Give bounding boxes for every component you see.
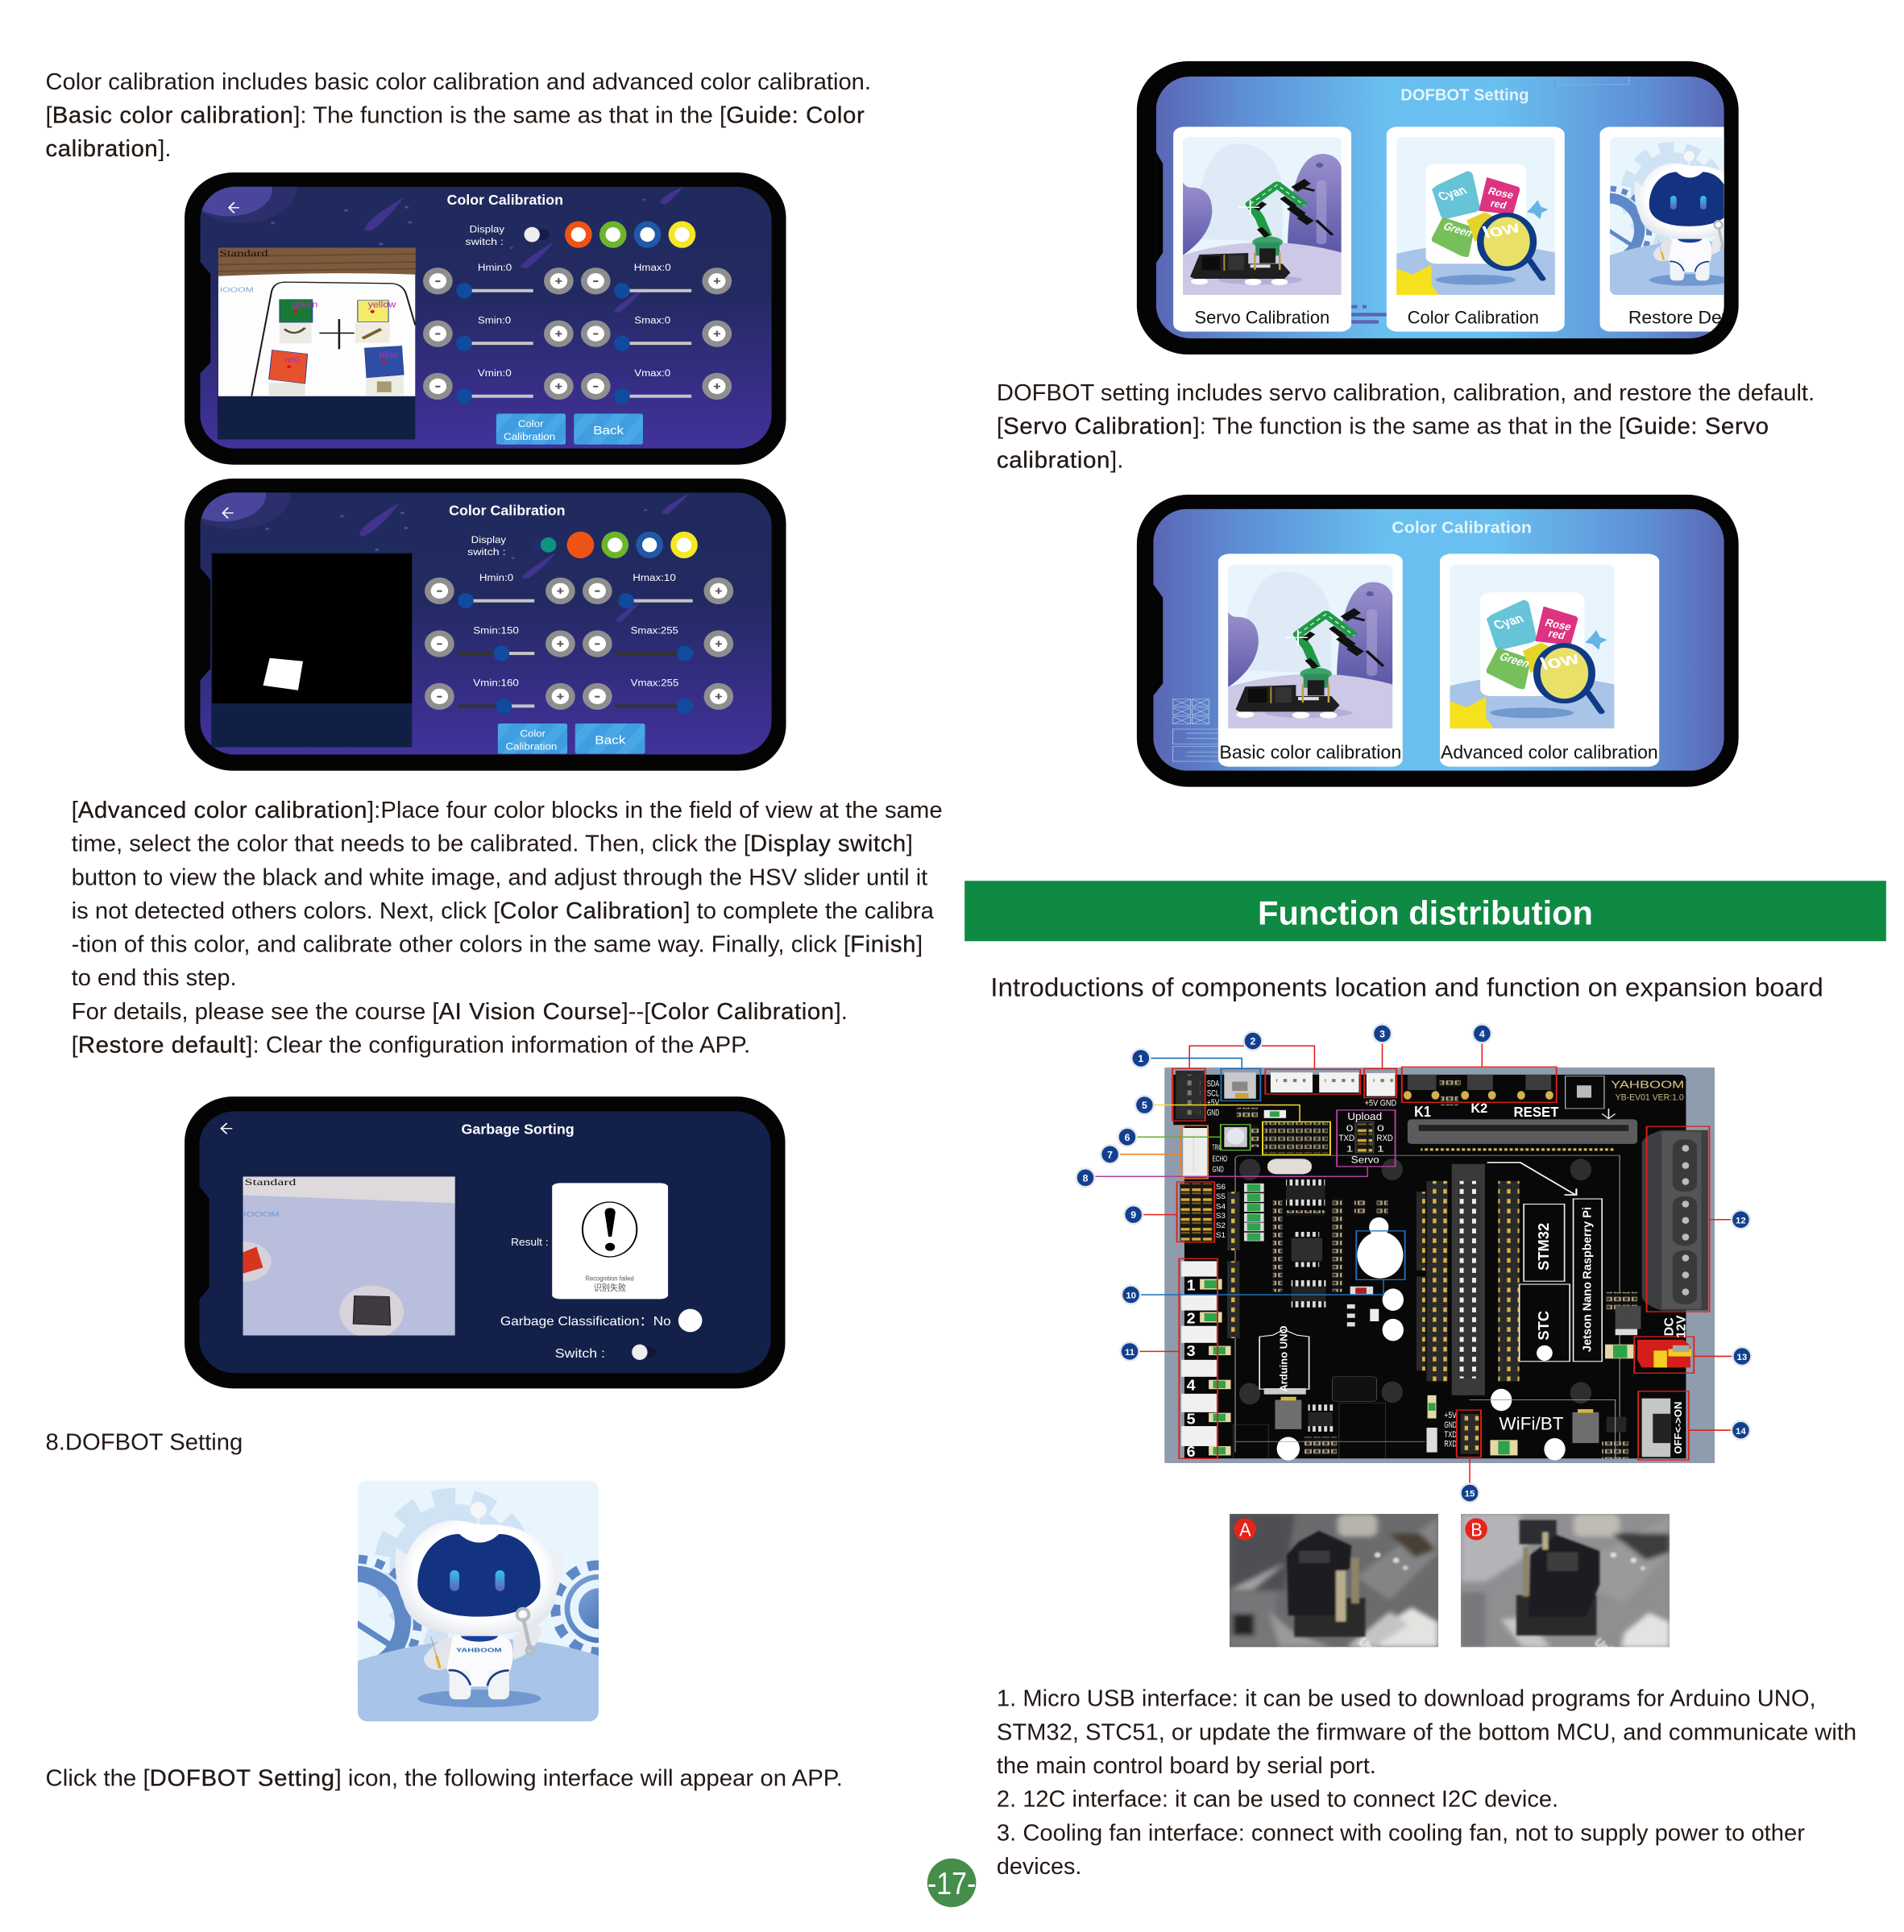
number badge 6: 6 bbox=[1125, 1132, 1130, 1143]
card: advanced color calibration: Advanced color calibration bbox=[1441, 743, 1658, 763]
component list text: 3. Cooling fan interface: connect with cooling fan, not to supply power to other bbox=[997, 1820, 1805, 1846]
expansion board diagram: TXD bbox=[1444, 1430, 1457, 1440]
DOFBOT setting description text: calibration]. bbox=[997, 447, 1123, 473]
expansion board diagram: K1 bbox=[1414, 1103, 1431, 1120]
camera image with colour cubes bbox=[218, 247, 415, 439]
result card: recognition failed: 识别失败 bbox=[594, 1283, 626, 1292]
badge B: B bbox=[1471, 1519, 1483, 1540]
back arrow bbox=[221, 1123, 232, 1134]
result card: recognition failed: Recognition failed bbox=[586, 1275, 634, 1283]
HSV sliders bbox=[425, 573, 733, 714]
HSV sliders: Vmin:0 bbox=[478, 368, 512, 379]
expansion board diagram: 1 bbox=[1377, 1144, 1384, 1155]
HSV sliders: Hmax:10 bbox=[633, 573, 676, 583]
component list text: the main control board by serial port. bbox=[997, 1753, 1376, 1779]
expansion board diagram: GND bbox=[1444, 1420, 1457, 1429]
phone: color calibration menu bbox=[1137, 495, 1739, 787]
switch toggle bbox=[555, 1345, 656, 1361]
expansion board diagram: RESET bbox=[1514, 1104, 1559, 1120]
heading: 8. DOFBOT Setting: 8.DOFBOT Setting bbox=[46, 1430, 243, 1456]
number badge 13: 13 bbox=[1737, 1353, 1747, 1362]
back arrow bbox=[223, 508, 234, 518]
badge B bbox=[1465, 1518, 1487, 1540]
card: advanced color calibration: Rose bbox=[1543, 616, 1574, 633]
HSV sliders: Smax:255 bbox=[631, 625, 678, 636]
card: advanced color calibration bbox=[1440, 553, 1659, 767]
display switch with colour selectors bbox=[466, 221, 695, 248]
intro text block: Color calibration includes basic color calibration and advanced color calibration. bbox=[46, 69, 871, 95]
intro text block: [Basic color calibration ]: The function is the same as that in the [ Guide: Color bbox=[46, 103, 865, 129]
advanced color calibration text block: For details, please see the course [ AI Vision Course]--[Color Calibration]. bbox=[72, 999, 848, 1025]
section banner: function distribution bbox=[964, 881, 1886, 941]
HSV sliders: Smin:0 bbox=[478, 315, 511, 326]
DOFBOT setting description text: DOFBOT setting includes servo calibration, calibration, and restore the default. bbox=[997, 380, 1815, 406]
card: advanced color calibration: Cyan bbox=[1491, 612, 1527, 632]
rotated board labels: Raspberry Pi bbox=[1582, 1207, 1595, 1279]
expansion board diagram: S2 bbox=[1216, 1222, 1226, 1229]
camera image with colour cubes: green bbox=[292, 300, 317, 309]
advanced color calibration text block: to end this step. bbox=[72, 965, 237, 991]
advanced color calibration text block: -tion of this color, and calibrate other colors in the same way. Finally, click [ Finish] bbox=[72, 932, 923, 958]
component list text: 2. 12C interface: it can be used to connect I2C device. bbox=[997, 1787, 1558, 1813]
button: color calibration: Color bbox=[518, 419, 543, 429]
card: advanced color calibration: low bbox=[1537, 648, 1583, 674]
expansion board diagram: YB-EV01 VER:1.0 bbox=[1616, 1092, 1684, 1103]
number badge 10: 10 bbox=[1126, 1291, 1136, 1301]
number badge 8 bbox=[1076, 1168, 1094, 1187]
garbage classification toggle: Garbage Classification：No bbox=[500, 1314, 671, 1329]
camera image with colour cubes: yellow bbox=[368, 300, 396, 309]
card: advanced color calibration: Green bbox=[1497, 650, 1533, 670]
number badge 9: 9 bbox=[1130, 1209, 1136, 1221]
display switch with colour selectors: switch : bbox=[466, 237, 504, 247]
number badge 2 bbox=[1243, 1032, 1262, 1051]
screen title: Color Calibration bbox=[447, 192, 563, 208]
expansion board diagram: S4 bbox=[1216, 1203, 1226, 1211]
photo A: jumper cap position bbox=[1230, 1514, 1438, 1647]
expansion board diagram: 5 bbox=[1187, 1410, 1196, 1427]
display switch with colour selectors: Display bbox=[471, 535, 506, 545]
card: color calibration: red bbox=[1489, 197, 1508, 211]
number badge 9 bbox=[1124, 1205, 1143, 1224]
expansion board diagram: Servo bbox=[1351, 1155, 1379, 1166]
camera image with colour cubes: Standard bbox=[219, 248, 268, 259]
switch toggle: Switch : bbox=[555, 1347, 605, 1361]
card: restore default (cropped) bbox=[1600, 126, 1724, 332]
advanced color calibration text block: is not detected others colors. Next, click [ Color Calibration] to complete the calibra bbox=[72, 898, 934, 924]
robot mascot illustration bbox=[292, 1481, 642, 1722]
HSV sliders: Vmin:160 bbox=[473, 678, 519, 689]
rotated board labels: Jetson Nano bbox=[1582, 1282, 1595, 1352]
robot mascot illustration: YAHBOOM bbox=[456, 1646, 502, 1653]
card: basic color calibration bbox=[1218, 553, 1403, 767]
number badge 1: 1 bbox=[1138, 1053, 1143, 1064]
expansion board diagram: S3 bbox=[1216, 1213, 1226, 1221]
number badge 15: 15 bbox=[1465, 1490, 1475, 1499]
expansion board diagram: TXD bbox=[1338, 1133, 1354, 1143]
rotated board labels: DC bbox=[1661, 1317, 1676, 1336]
page number: -17- bbox=[927, 1867, 976, 1901]
subheading: Introductions of components location and function on expansion board bbox=[990, 972, 1823, 1001]
expansion board diagram: S1 bbox=[1216, 1232, 1226, 1239]
expansion board diagram: +5V bbox=[1444, 1410, 1457, 1420]
rotated board labels: STM32 bbox=[1535, 1223, 1552, 1271]
expansion board diagram: +5V bbox=[1207, 1097, 1220, 1108]
badge A: A bbox=[1239, 1519, 1251, 1540]
number badge 8: 8 bbox=[1083, 1172, 1089, 1184]
screen title: Color Calibration bbox=[1392, 518, 1532, 537]
phone: garbage sorting bbox=[185, 1097, 785, 1388]
DOFBOT setting description text bbox=[997, 380, 1815, 473]
display switch with colour selectors: switch : bbox=[467, 547, 506, 558]
button: color calibration bbox=[496, 413, 566, 445]
back arrow bbox=[229, 202, 239, 213]
DOFBOT setting description text: [Servo Calibration ]: The function is the same as that in the [ Guide: Servo bbox=[997, 414, 1769, 440]
expansion board diagram: 1 bbox=[1187, 1277, 1196, 1294]
number badge 10 bbox=[1122, 1286, 1140, 1304]
phone: color calibration standard view bbox=[185, 153, 786, 465]
result card: recognition failed bbox=[552, 1183, 668, 1299]
button: back: Back bbox=[595, 734, 626, 748]
expansion board diagram: 0 bbox=[1377, 1123, 1384, 1134]
rotated board labels: Arduino UNO bbox=[1278, 1325, 1290, 1392]
intro text block: calibration]. bbox=[46, 136, 172, 162]
screen title: Garbage Sorting bbox=[461, 1121, 575, 1137]
button: back bbox=[574, 413, 643, 445]
expansion board diagram: +5V GND bbox=[1365, 1098, 1396, 1108]
number badge 14 bbox=[1732, 1421, 1750, 1440]
screen title: DOFBOT Setting bbox=[1400, 86, 1529, 104]
number badge 3 bbox=[1373, 1024, 1392, 1043]
HSV sliders: Smin:150 bbox=[473, 625, 519, 636]
button: color calibration: Calibration bbox=[504, 432, 555, 442]
HSV sliders: Hmax:0 bbox=[634, 263, 671, 273]
badge A bbox=[1234, 1518, 1256, 1540]
expansion board diagram: RXD bbox=[1444, 1439, 1457, 1449]
advanced color calibration text block: [Restore default ]: Clear the configuration information of the APP. bbox=[72, 1033, 750, 1059]
rotated board labels: STC bbox=[1535, 1311, 1552, 1341]
result label: Result : bbox=[511, 1236, 549, 1248]
expansion board diagram: YAHBOOM bbox=[1611, 1079, 1684, 1091]
number badge 11: 11 bbox=[1125, 1348, 1135, 1358]
number badge 13 bbox=[1732, 1347, 1751, 1366]
card: color calibration: Color Calibration bbox=[1408, 308, 1539, 327]
camera image with colour cubes: IOOOM bbox=[220, 287, 254, 294]
expansion board diagram bbox=[1076, 1024, 1751, 1503]
HSV sliders: Hmin:0 bbox=[478, 263, 512, 273]
phone: color calibration black and white view bbox=[180, 459, 786, 771]
number badge 7 bbox=[1101, 1145, 1119, 1163]
card: servo calibration: Servo Calibration bbox=[1195, 308, 1329, 327]
number badge 12 bbox=[1732, 1210, 1750, 1229]
card: color calibration: Green bbox=[1441, 220, 1475, 239]
expansion board diagram: K2 bbox=[1471, 1101, 1487, 1116]
expansion board diagram: 1 bbox=[1346, 1144, 1354, 1155]
HSV sliders: Smax:0 bbox=[634, 315, 670, 326]
card: restore default (cropped): Restore Default bbox=[1628, 308, 1757, 327]
expansion board diagram: 6 bbox=[1187, 1443, 1196, 1460]
advanced color calibration text block bbox=[72, 798, 943, 1059]
number badge 4: 4 bbox=[1479, 1028, 1485, 1039]
display switch with colour selectors: Display bbox=[470, 224, 504, 235]
photo B: jumper cap position: Upload bbox=[1591, 1636, 1628, 1668]
expansion board diagram: GND bbox=[1212, 1164, 1224, 1174]
expansion board diagram: 2 bbox=[1187, 1310, 1196, 1327]
expansion board diagram: ECHO bbox=[1212, 1155, 1227, 1163]
button: back: Back bbox=[593, 425, 624, 437]
number badge 15 bbox=[1461, 1484, 1479, 1503]
HSV sliders: Vmax:0 bbox=[634, 368, 670, 379]
section banner: function distribution: Function distribution bbox=[1258, 895, 1593, 932]
number badge 7: 7 bbox=[1107, 1149, 1113, 1160]
black and white threshold image bbox=[211, 553, 412, 747]
expansion board diagram: WiFi/BT bbox=[1499, 1413, 1564, 1434]
number badge 12: 12 bbox=[1736, 1216, 1746, 1225]
number badge 5: 5 bbox=[1142, 1100, 1147, 1111]
number badge 14: 14 bbox=[1736, 1427, 1746, 1437]
card: color calibration: Rose bbox=[1486, 185, 1516, 201]
button: color calibration: Color bbox=[520, 729, 545, 740]
expansion board diagram: 3 bbox=[1187, 1342, 1196, 1359]
number badge 2: 2 bbox=[1251, 1036, 1256, 1047]
advanced color calibration text block: [Advanced color calibration ]:Place four color blocks in the field of view at the same bbox=[72, 798, 943, 823]
expansion board diagram: GND bbox=[1207, 1108, 1219, 1118]
highlight boxes bbox=[1172, 1067, 1709, 1460]
intro text block bbox=[46, 69, 871, 162]
card: basic color calibration: Basic color calibration bbox=[1219, 743, 1401, 763]
component list text: 1. Micro USB interface: it can be used to download programs for Arduino UNO, bbox=[997, 1686, 1816, 1712]
camera image bbox=[243, 1176, 455, 1336]
card: color calibration: Cyan bbox=[1435, 183, 1470, 203]
number badge 4 bbox=[1473, 1024, 1491, 1043]
expansion board diagram: Upload bbox=[1347, 1111, 1382, 1122]
page number bbox=[927, 1859, 976, 1907]
camera image with colour cubes: red bbox=[284, 355, 299, 364]
card: advanced color calibration: red bbox=[1546, 628, 1567, 641]
camera image: Standard bbox=[245, 1177, 297, 1188]
number badge 11 bbox=[1121, 1342, 1139, 1361]
expansion board diagram: 4 bbox=[1187, 1376, 1196, 1393]
button: color calibration bbox=[498, 723, 567, 754]
leader lines bbox=[1085, 1034, 1742, 1493]
expansion board diagram: S5 bbox=[1216, 1193, 1226, 1200]
advanced color calibration text block: time, select the color that needs to be calibrated. Then, click the [ Display switch] bbox=[72, 831, 913, 857]
number badge 5 bbox=[1135, 1096, 1154, 1114]
HSV sliders bbox=[423, 263, 732, 404]
card: color calibration: low bbox=[1479, 217, 1523, 243]
component list text bbox=[997, 1686, 1856, 1880]
display switch with colour selectors bbox=[467, 532, 698, 558]
photo A: jumper cap position: Upload bbox=[1355, 1636, 1392, 1668]
camera image with colour cubes: blue bbox=[379, 350, 399, 359]
rotated board labels: OFF<->ON bbox=[1672, 1402, 1684, 1454]
garbage classification toggle bbox=[500, 1309, 702, 1332]
instruction text: Click the [DOFBOT Setting ] icon, the following interface will appear on APP. bbox=[46, 1765, 843, 1791]
expansion board diagram: SDA bbox=[1207, 1079, 1220, 1089]
number badge 3: 3 bbox=[1379, 1028, 1385, 1039]
card: color calibration bbox=[1387, 126, 1565, 332]
button: color calibration: Calibration bbox=[506, 741, 557, 752]
camera image: IOOOM bbox=[243, 1212, 280, 1218]
rotated board labels bbox=[1278, 1207, 1689, 1454]
number badge 1 bbox=[1131, 1049, 1150, 1068]
HSV sliders: Vmax:255 bbox=[631, 678, 678, 689]
rotated board labels: 12V bbox=[1674, 1315, 1689, 1338]
component list text: devices. bbox=[997, 1854, 1081, 1880]
photo B: jumper cap position bbox=[1461, 1514, 1670, 1647]
expansion board diagram: S6 bbox=[1216, 1184, 1226, 1192]
card: servo calibration bbox=[1173, 126, 1351, 332]
button: back bbox=[575, 723, 645, 754]
phone: DOFBOT setting menu bbox=[1137, 61, 1797, 354]
expansion board diagram: TRIG bbox=[1212, 1143, 1222, 1152]
component list text: STM32, STC51, or update the firmware of the bottom MCU, and communicate with bbox=[997, 1719, 1856, 1745]
HSV sliders: Hmin:0 bbox=[479, 573, 513, 583]
expansion board diagram: 0 bbox=[1346, 1123, 1354, 1134]
number badge 6 bbox=[1118, 1128, 1136, 1146]
screen title: Color Calibration bbox=[449, 502, 566, 519]
expansion board diagram: RXD bbox=[1377, 1133, 1393, 1143]
expansion board diagram: SCL bbox=[1207, 1088, 1219, 1099]
advanced color calibration text block: button to view the black and white image, and adjust through the HSV slider until it bbox=[72, 864, 927, 890]
